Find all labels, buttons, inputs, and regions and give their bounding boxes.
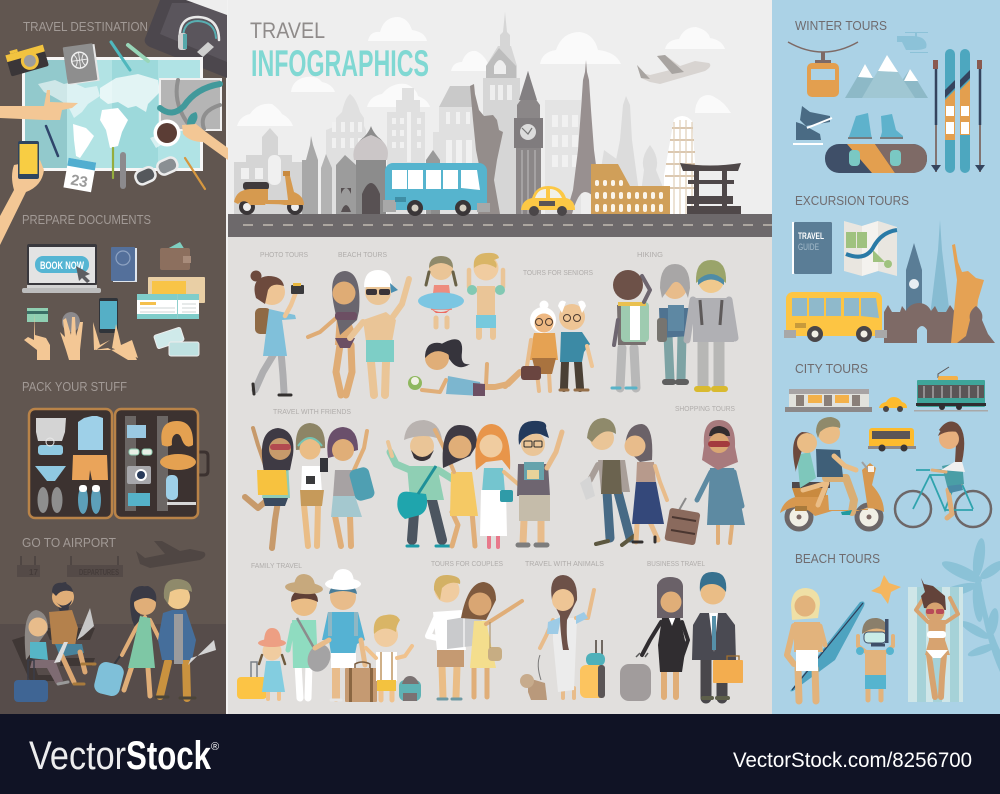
icon: calendar: [63, 158, 96, 192]
surfer: [787, 588, 864, 701]
icon: small bus: [868, 428, 916, 452]
heading: city tours: CITY TOURS: [795, 362, 868, 376]
label: PHOTO TOURS: [260, 252, 308, 259]
label: TOURS FOR SENIORS: [523, 270, 593, 277]
person: woman in bikini: [308, 271, 359, 395]
icon: small tickets: [154, 327, 199, 356]
person: business woman: [642, 577, 688, 697]
faint far buildings: [326, 86, 668, 214]
icon: passport: [63, 43, 100, 85]
woman sunbathing on towel: [908, 578, 963, 702]
person: girl with pink hat and yellow suitcase: [237, 628, 286, 699]
label: FAMILY TRAVEL: [251, 563, 302, 570]
person: bearded man with hat and bag: [388, 420, 454, 546]
woman in green dress: [93, 586, 170, 698]
icon: hand right: [182, 124, 228, 160]
bus: [383, 163, 490, 216]
person: father with white hat: [315, 569, 365, 700]
footer bar: [0, 714, 1000, 794]
title: [250, 18, 429, 84]
panel: center top skyline: [228, 0, 772, 237]
person: woman with yellow bag: [245, 428, 293, 548]
image id: VectorStock.com/8256700: [733, 749, 972, 772]
world map: [22, 57, 222, 171]
taxi: [521, 186, 575, 216]
person: woman in hijab with suitcase: [664, 420, 745, 546]
statue of liberty: [470, 84, 503, 214]
person: shopper man with map: [580, 418, 634, 545]
icon: wallet: [160, 242, 191, 270]
person: mother with hat and grey bag: [285, 574, 334, 698]
icon: small taxi: [879, 397, 907, 412]
colosseum: [591, 164, 670, 214]
label: BEACH TOURS: [338, 252, 387, 259]
person: woman pointing: [461, 582, 522, 697]
blue suitcase: [14, 660, 48, 702]
person: woman in white dress with braid: [540, 575, 594, 698]
icon: backpack: [399, 676, 421, 701]
icon: snowboard: [825, 144, 927, 173]
label: TOURS FOR COUPLES: [431, 561, 503, 568]
person: boy in suspenders: [366, 615, 412, 700]
big ben: [514, 71, 543, 214]
airport signs: 17: [29, 568, 38, 577]
icon: train: [785, 389, 872, 412]
icon: plane silhouette: [136, 541, 205, 568]
left light building: [234, 128, 318, 214]
cyclist with bicycle: [895, 422, 991, 527]
label: BUSINESS TRAVEL: [647, 561, 705, 568]
icon: folded map: [844, 221, 897, 276]
icon: yellow suitcase with teal bag: [580, 640, 605, 698]
continents: [38, 74, 166, 158]
person: woman in navy skirt: [624, 424, 667, 542]
heading: pack your stuff: PACK YOUR STUFF: [22, 380, 127, 394]
building windows: [332, 112, 578, 167]
heading: travel destination: TRAVEL DESTINATION: [23, 20, 148, 34]
logo: VectorStock: Stock: [126, 734, 212, 778]
person: hiker woman in beanie: [657, 264, 692, 382]
icon: laptop with book now: BOOK NOW: [40, 260, 84, 272]
fold-out city map: [159, 78, 222, 131]
couple walking: [93, 579, 216, 698]
scooter: [234, 171, 304, 215]
label: SHOPPING TOURS: [675, 406, 735, 413]
heading: prepare documents: PREPARE DOCUMENTS: [22, 213, 151, 227]
logo: VectorStock: [29, 734, 219, 778]
person: girl with swim ring: [418, 256, 464, 327]
person: woman with headband: [296, 423, 328, 546]
icon: camera: [5, 42, 49, 77]
icon: dog with leash: [520, 655, 547, 700]
man in blue jacket: [156, 579, 216, 698]
icon: tram: [914, 367, 988, 412]
panel: right blue column: [772, 0, 1000, 714]
icon: coffee cup: [154, 120, 180, 146]
heading: beach tours: BEACH TOURS: [795, 552, 880, 566]
man with newspaper: [49, 582, 95, 684]
title: INFOGRAPHICS: [251, 43, 429, 84]
person: woman photographing: [250, 270, 304, 395]
person: hiker with backpack: [612, 270, 650, 388]
clothes: [35, 416, 108, 514]
travel items: [127, 421, 196, 506]
icon: pens on map: [46, 42, 205, 189]
woman with laptop: [25, 610, 68, 684]
icon: tickets: [137, 277, 205, 319]
person: senior woman: [521, 300, 558, 391]
label: TRAVEL WITH ANIMALS: [525, 561, 604, 568]
airport signs: DEPARTURES: [79, 568, 119, 577]
icon: helicopter: [897, 32, 928, 53]
person: woman in yellow dress: [435, 425, 478, 546]
starfish: [871, 575, 901, 604]
person: man with glasses and camera: [517, 421, 562, 545]
road: [228, 214, 772, 237]
people waiting on seats: [12, 582, 95, 702]
kid with snorkel: [856, 618, 894, 700]
driver man: [816, 417, 856, 515]
icon: hands with card, mouse and phone: [24, 298, 138, 360]
icon: ski boots: [848, 113, 903, 139]
panel: center lower people: [228, 237, 772, 714]
plane: [637, 55, 710, 84]
suitcase: [93, 656, 125, 698]
eiffel tower: [566, 60, 604, 214]
icon: ice skates: [793, 106, 832, 144]
icon: laptop with book now: [22, 244, 101, 293]
icon: hand with yellow phone: [0, 141, 44, 245]
icon: yellow bus: [784, 292, 887, 342]
logo: VectorStock: Vector: [29, 734, 126, 778]
logo: VectorStock: ®: [211, 741, 219, 753]
icon: headphones: [178, 17, 219, 57]
icon: mountains: [845, 55, 928, 98]
label: TRAVEL WITH FRIENDS: [273, 409, 351, 416]
heading: excursion tours: EXCURSION TOURS: [795, 194, 909, 208]
person: woman with teal duffel: [327, 427, 376, 546]
title: TRAVEL: [250, 18, 325, 43]
icon: brown suitcase: [345, 662, 377, 702]
passenger woman: [793, 432, 827, 505]
pisa tower: [664, 116, 696, 214]
icon: sunglasses: [133, 156, 179, 186]
label: HIKING: [637, 252, 663, 259]
icon: laptop keyboard: [145, 0, 227, 78]
clouds: [237, 17, 731, 126]
torii gate: [680, 163, 741, 214]
person: hiker man: [687, 260, 735, 389]
tower with tall spire: [483, 12, 520, 214]
person: man with map: [428, 575, 482, 699]
icon: grey suitcase: [620, 653, 651, 701]
airport signs: [17, 556, 123, 577]
person: redhead with white skirt: [475, 424, 518, 547]
person: man in trunks and cap: [350, 270, 409, 395]
palm trees: [937, 537, 1000, 672]
heading: go to airport: GO TO AIRPORT: [22, 536, 116, 550]
person: boy with floaties: [467, 253, 505, 337]
icon: cable car: [788, 42, 858, 97]
icon: landmarks: [884, 220, 995, 343]
icon: calendar: 23: [69, 172, 89, 191]
couple on orange scooter: [780, 417, 884, 529]
icon: travel guide book: [792, 222, 832, 274]
heading: winter tours: WINTER TOURS: [795, 19, 887, 33]
person: senior man: [558, 301, 592, 390]
minaret towers and gate: [302, 126, 440, 214]
icon: hand pointing: [0, 90, 78, 120]
person: business man with briefcase: [692, 572, 743, 698]
icon: travel guide book: GUIDE: [798, 242, 819, 252]
icon: skis and poles: [931, 49, 985, 173]
icon: blue passport: [111, 247, 137, 282]
person: girl lying with coconut: [408, 339, 520, 396]
open suitcase: [29, 409, 208, 518]
icon: travel guide book: TRAVEL: [798, 231, 824, 241]
